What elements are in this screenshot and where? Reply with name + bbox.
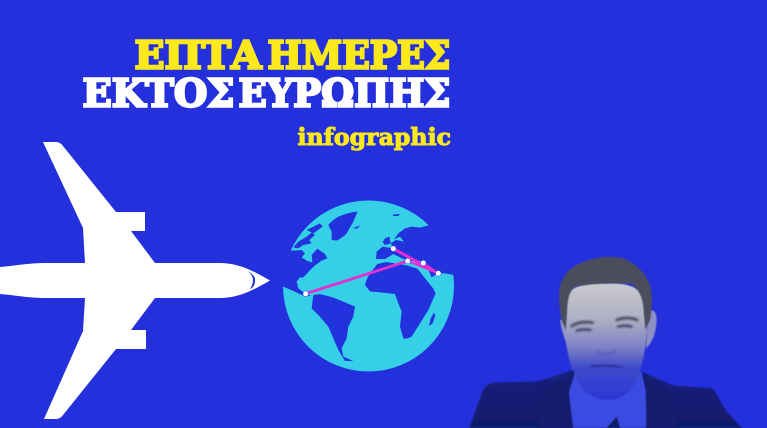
shirt xyxy=(569,372,647,428)
Africa xyxy=(365,262,436,339)
portrait: man in dark suit xyxy=(469,257,742,428)
North America xyxy=(283,248,328,296)
jacket xyxy=(469,369,742,428)
Greenland xyxy=(328,212,358,241)
title line 1: ΗΜΕΡΕΣ xyxy=(268,33,450,78)
British Isles xyxy=(383,237,391,245)
icon: airplane xyxy=(0,142,270,419)
title line 2 xyxy=(82,71,450,116)
route stops xyxy=(303,246,441,297)
title line 1 xyxy=(134,33,450,78)
face xyxy=(564,283,647,400)
Eurasia xyxy=(376,217,470,277)
hair xyxy=(559,257,652,330)
route lines xyxy=(306,249,438,294)
globe sphere xyxy=(283,200,454,372)
South America xyxy=(312,294,355,361)
Arctic islands xyxy=(293,233,315,248)
eyes xyxy=(577,326,632,331)
continents xyxy=(283,212,454,361)
brows xyxy=(572,318,637,326)
globe with route xyxy=(283,200,454,372)
lapels xyxy=(537,371,677,428)
ears xyxy=(646,310,657,348)
title line 2: ΕΥΡΩΠΗΣ xyxy=(238,71,450,116)
title line 2: ΕΚΤΟΣ xyxy=(82,71,234,116)
airplane windshield xyxy=(248,271,255,289)
Madagascar xyxy=(429,313,435,326)
mouth xyxy=(591,365,621,367)
title line 1: ΕΠΤΑ xyxy=(134,33,262,78)
subtitle: infographic: infographic xyxy=(298,124,451,151)
nose shadow xyxy=(595,349,617,357)
